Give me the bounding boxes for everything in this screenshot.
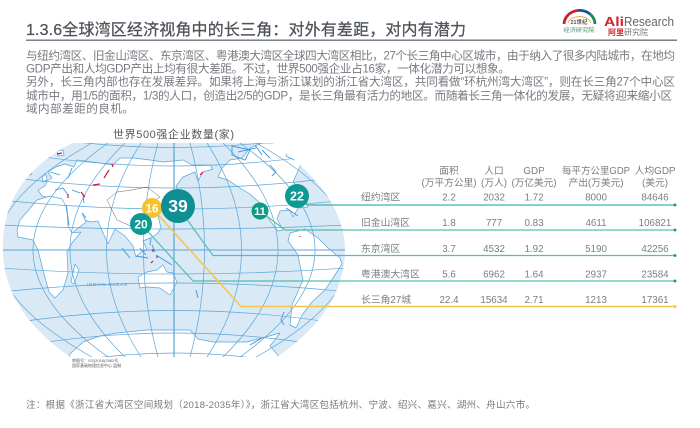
row: 旧金山湾区: 106821 bbox=[639, 218, 671, 229]
connector: 长三角27城 bbox=[152, 208, 675, 306]
red markers bbox=[57, 153, 300, 263]
row: 粤港澳大湾区: 6962 bbox=[483, 270, 505, 280]
row: 长三角27城: 2.71 bbox=[524, 295, 544, 306]
intro paragraph: 与纽约湾区、旧金山湾区、东京湾区、粤港澳大湾区全球四大湾区相比，27个长三角中心区城市，由于纳入了很多内陆城市，在地均 bbox=[26, 48, 675, 62]
title rule bbox=[26, 40, 677, 41]
bubble: 16 bbox=[142, 198, 162, 218]
title: 1.3.6全球湾区经济视角中的长三角：对外有差距，对内有潜力 bbox=[26, 21, 466, 39]
ocean bbox=[0, 140, 350, 360]
row: 长三角27城: 长三角27城 bbox=[361, 294, 411, 306]
row: 纽约湾区: 8000 bbox=[585, 192, 607, 204]
intro paragraph: 城市中，用1/5的面积，1/3的人口，创造出2/5的GDP，是长三角最有活力的地区。而随着长三角一体化的发展，无疑将迎来缩小区 bbox=[26, 88, 672, 102]
row: 纽约湾区 bbox=[361, 190, 669, 204]
map approval number: 审图号：GS(2016)2962号 bbox=[72, 357, 118, 363]
row: 旧金山湾区: 1.8 bbox=[442, 218, 456, 229]
row: 东京湾区: 1.92 bbox=[524, 244, 544, 255]
row: 粤港澳大湾区: 5.6 bbox=[442, 270, 456, 280]
table header: 产出(万美元) bbox=[568, 176, 624, 189]
row: 纽约湾区: 2032 bbox=[483, 192, 505, 204]
row: 粤港澳大湾区 bbox=[361, 268, 669, 280]
connector: 旧金山湾区 bbox=[260, 211, 675, 230]
logo: AliResearch: Research bbox=[624, 14, 674, 29]
map heading: 世界500强企业数量(家) bbox=[113, 127, 234, 141]
table header: GDP bbox=[523, 166, 545, 177]
row: 东京湾区: 3.7 bbox=[442, 244, 456, 255]
landmasses bbox=[17, 143, 342, 360]
row: 粤港澳大湾区: 粤港澳大湾区 bbox=[361, 268, 420, 280]
table header: (万亿美元) bbox=[512, 176, 556, 189]
table header: (万平方公里) bbox=[422, 176, 476, 189]
bubble: 11 bbox=[252, 202, 268, 220]
logo: 21世纪经济研究院 bbox=[564, 10, 595, 34]
bubble: 39 bbox=[161, 189, 195, 223]
world map bbox=[3, 143, 345, 357]
row: 长三角27城: 17361 bbox=[641, 295, 669, 306]
row: 粤港澳大湾区: 23584 bbox=[641, 270, 669, 280]
China border bbox=[107, 187, 160, 228]
row end dots bbox=[674, 204, 676, 308]
map approval number: 国家基础地理信息中心 监制 bbox=[72, 362, 121, 368]
ocean label: INDIAN OCEAN bbox=[87, 282, 127, 287]
row: 粤港澳大湾区: 1.64 bbox=[524, 270, 544, 280]
intro paragraph: 另外，长三角内部也存在发展差异。如果将上海与浙江谋划的浙江省大湾区，共同看做“环杭州湾大湾区”，则在长三角27个中心区 bbox=[26, 74, 675, 88]
intro paragraph: GDP产出和人均GDP产出上均有很大差距。不过，世界500强企业占16家，一体化潜力可以想象。 bbox=[26, 62, 510, 76]
graticule bbox=[3, 143, 345, 357]
data table bbox=[361, 164, 676, 306]
bubble: 20 bbox=[130, 213, 152, 235]
connector: 粤港澳大湾区 bbox=[141, 224, 675, 281]
logo: AliResearch bbox=[604, 14, 674, 37]
table header: 每平方公里GDP bbox=[562, 164, 630, 177]
row: 东京湾区 bbox=[361, 242, 669, 255]
intro paragraph: 域内部差距的良机。 bbox=[26, 102, 134, 116]
footnote: 注：根据《浙江省大湾区空间规划（2018-2035年）》，浙江省大湾区包括杭州、宁波、绍兴、嘉兴、湖州、舟山六市。 bbox=[26, 399, 535, 411]
row: 东京湾区: 5190 bbox=[585, 244, 607, 255]
row: 旧金山湾区: 777 bbox=[486, 218, 502, 229]
row: 旧金山湾区: 4611 bbox=[585, 218, 607, 229]
bubble: 20: 20 bbox=[134, 218, 148, 232]
connector: 东京湾区 bbox=[178, 207, 675, 256]
bubble: 11: 11 bbox=[254, 206, 266, 218]
connector: 纽约湾区 bbox=[297, 196, 675, 205]
table header: 人口 bbox=[484, 165, 504, 177]
row: 纽约湾区: 84646 bbox=[641, 192, 669, 204]
bubble: 22 bbox=[285, 184, 309, 208]
logo: AliResearch: Ali bbox=[604, 14, 624, 29]
intro paragraph bbox=[26, 48, 675, 116]
table header bbox=[422, 164, 676, 189]
table header: 面积 bbox=[439, 165, 459, 177]
row: 东京湾区: 42256 bbox=[641, 244, 669, 255]
row: 旧金山湾区 bbox=[361, 216, 671, 229]
row: 旧金山湾区: 0.83 bbox=[524, 218, 544, 229]
row: 旧金山湾区: 旧金山湾区 bbox=[361, 216, 410, 229]
row: 长三角27城: 1213 bbox=[585, 295, 607, 306]
connector lines bbox=[141, 196, 675, 306]
row: 长三角27城: 22.4 bbox=[439, 295, 459, 306]
row: 长三角27城: 15634 bbox=[480, 295, 508, 306]
logo: AliResearch: 研究院 bbox=[624, 27, 648, 37]
logo: 21世纪经济研究院: 21世纪 bbox=[570, 18, 588, 26]
row: 东京湾区: 东京湾区 bbox=[361, 242, 400, 255]
row: 粤港澳大湾区: 2937 bbox=[585, 270, 607, 280]
table header: (万人) bbox=[481, 177, 507, 189]
table header: 人均GDP bbox=[634, 165, 676, 177]
row: 纽约湾区: 2.2 bbox=[442, 192, 456, 204]
logo: 21世纪经济研究院: 经济研究院 bbox=[564, 26, 595, 34]
logo: AliResearch: 阿里 bbox=[608, 28, 624, 37]
table header: (美元) bbox=[642, 176, 668, 189]
map approval number bbox=[72, 357, 121, 368]
row: 长三角27城 bbox=[361, 294, 669, 306]
row: 东京湾区: 4532 bbox=[483, 244, 505, 255]
row: 纽约湾区: 1.72 bbox=[524, 192, 544, 204]
bubble: 16: 16 bbox=[146, 204, 158, 216]
bubble: 39: 39 bbox=[168, 196, 188, 216]
islands and inland waters bbox=[50, 145, 298, 345]
bubble: 22: 22 bbox=[290, 190, 304, 204]
row: 纽约湾区: 纽约湾区 bbox=[361, 190, 400, 204]
